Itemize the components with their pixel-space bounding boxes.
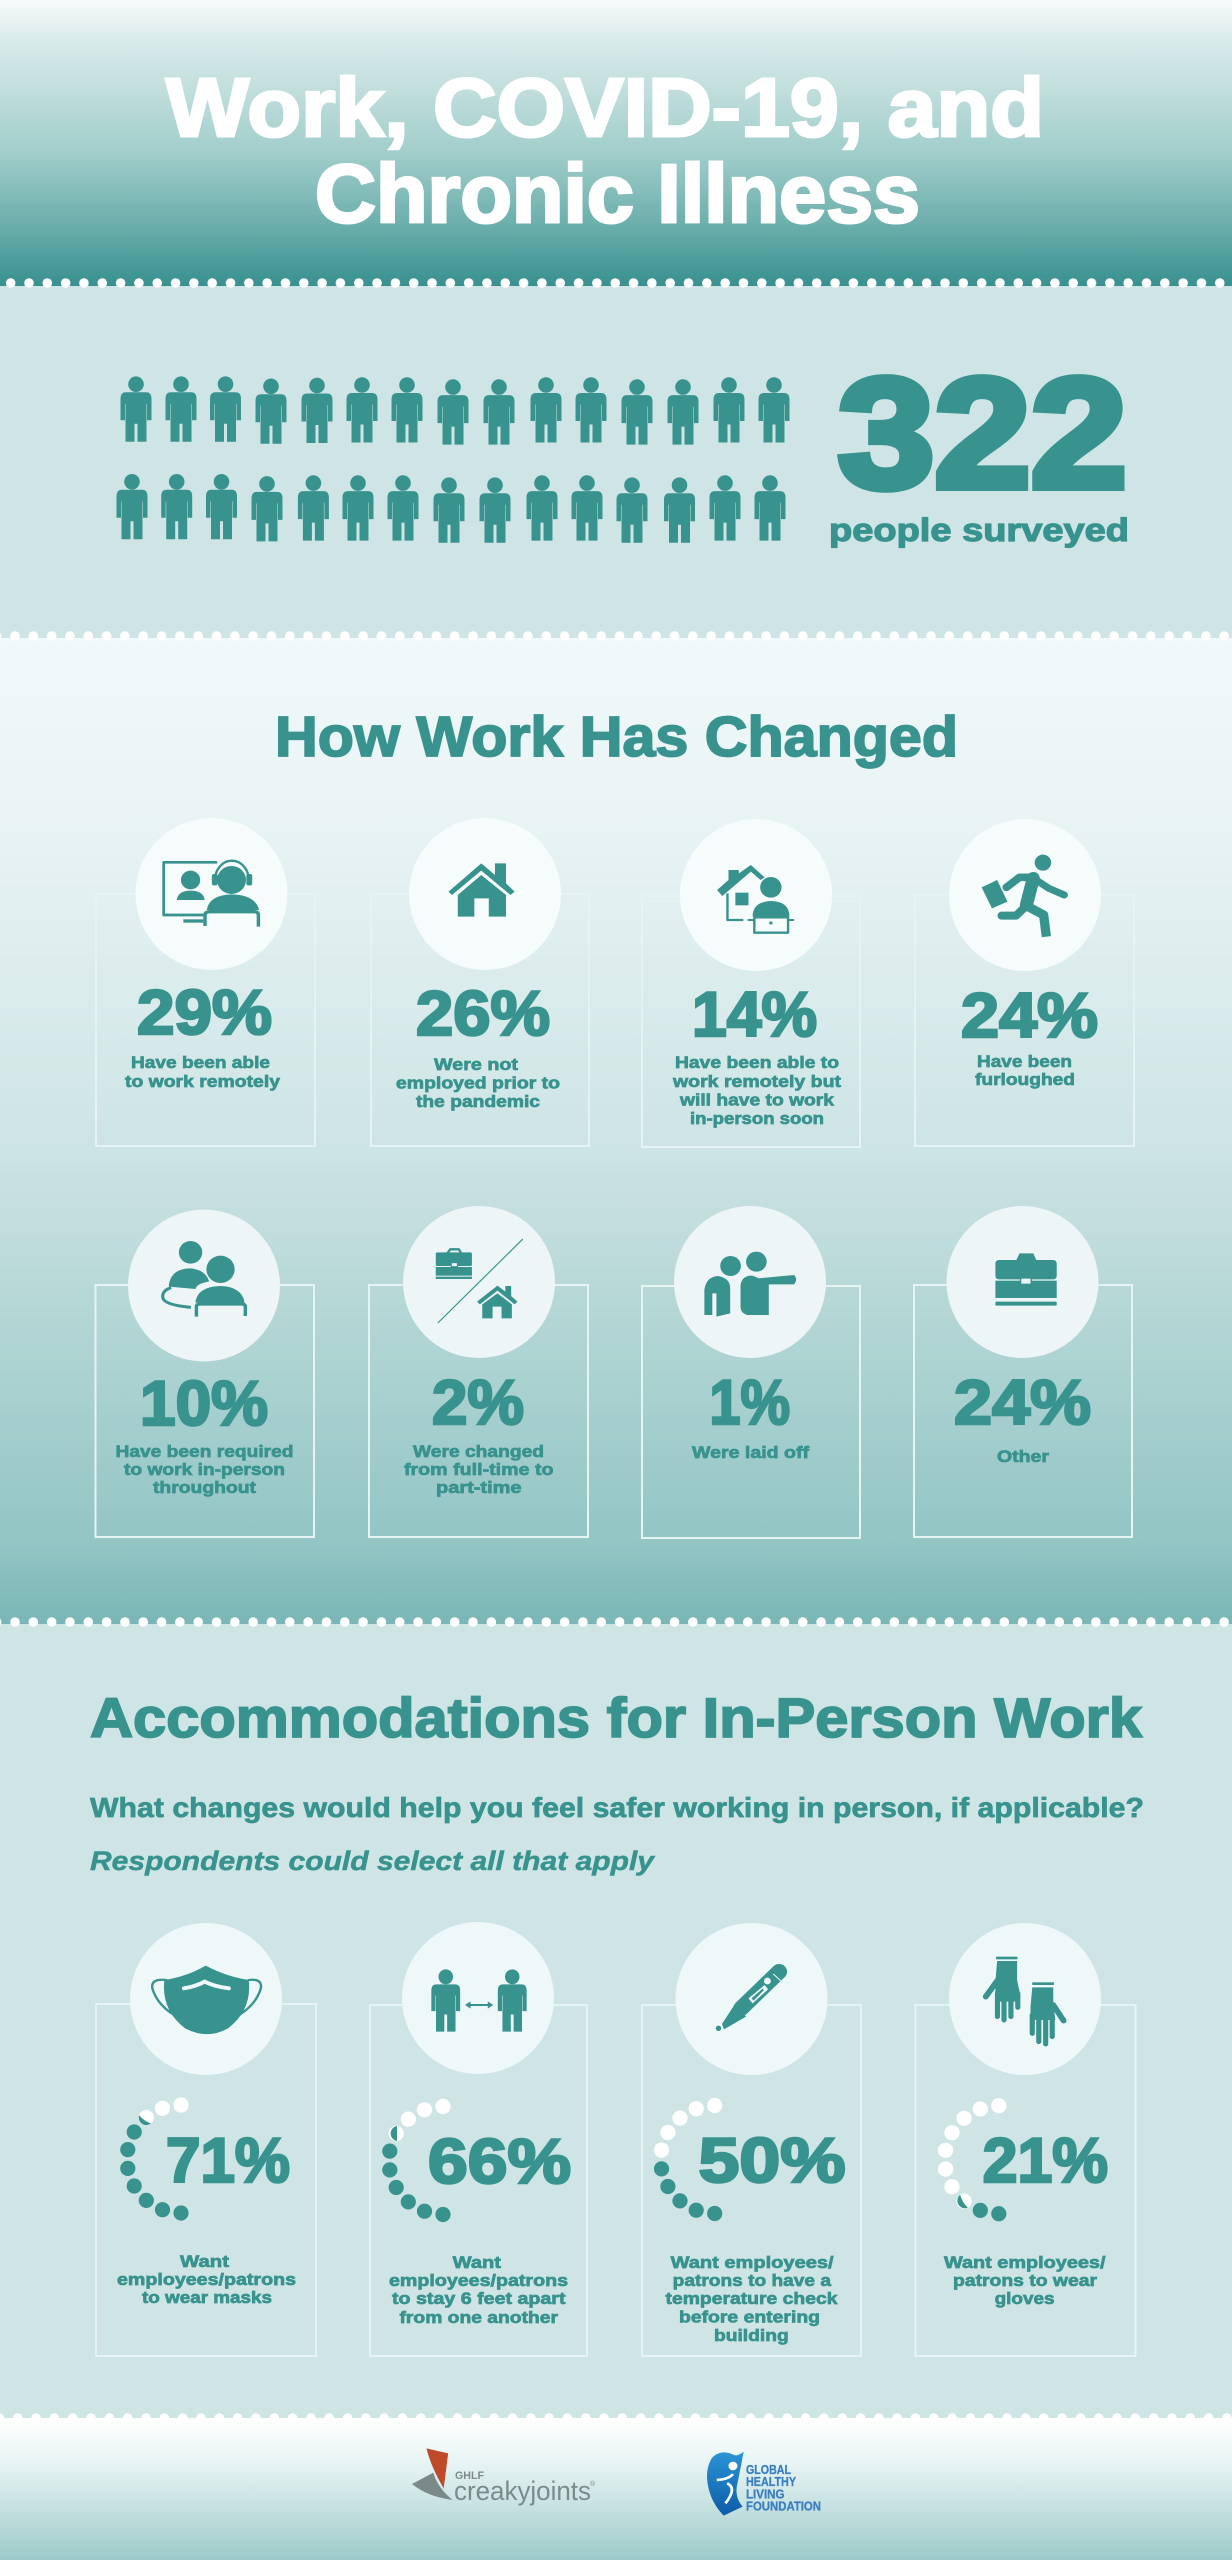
description: Want employees/: [944, 2254, 1106, 2272]
card: six feet apart 66%: [370, 1922, 587, 2356]
description: Were not: [434, 1056, 519, 1074]
description: [125, 1054, 281, 1091]
description: in-person soon: [690, 1110, 824, 1128]
value: 71%: [166, 2126, 290, 2196]
description: employees/patrons: [389, 2272, 568, 2290]
description: [117, 2253, 296, 2307]
panel: accommodations: [0, 1624, 1232, 2418]
description: to stay 6 feet apart: [392, 2290, 566, 2308]
description: patrons to have a: [673, 2272, 832, 2290]
description: Other: [997, 1448, 1050, 1466]
icon: person pointing at another person: [704, 1252, 796, 1317]
value: 10%: [140, 1369, 268, 1439]
icon: briefcase slash house: [436, 1239, 523, 1323]
description: [666, 2254, 838, 2345]
description: temperature check: [666, 2290, 838, 2308]
description: [116, 1443, 294, 1497]
description: part-time: [436, 1479, 522, 1497]
card: gloves 21%: [916, 1923, 1136, 2356]
heading: accommodations: Accommodations for In-Person Work: [90, 1686, 1143, 1749]
note: select all: Respondents could select all that apply: [90, 1846, 656, 1876]
caption: people surveyed: people surveyed: [829, 512, 1129, 548]
title: Chronic Illness: [315, 147, 920, 240]
panel: how work has changed: [0, 638, 1232, 1624]
description: Want: [180, 2253, 230, 2271]
icon: video call with headset: [164, 861, 259, 927]
icon: running man with briefcase: [982, 855, 1064, 937]
description: building: [714, 2327, 789, 2345]
progress dots: [120, 2097, 189, 2221]
description: Were changed: [413, 1443, 544, 1461]
description: patrons to wear: [953, 2272, 1098, 2290]
logo: Global Healthy Living Foundation: HEALTHY: [746, 2475, 797, 2489]
description: [944, 2254, 1106, 2308]
logo: Global Healthy Living Foundation: FOUNDATION: [746, 2500, 821, 2514]
description: to work remotely: [125, 1073, 281, 1091]
panel: header band: [0, 0, 1232, 287]
description: employees/patrons: [117, 2271, 296, 2289]
value: 50%: [698, 2126, 846, 2196]
card: not employed 26%: [371, 818, 589, 1146]
card: required in-person 10%: [96, 1210, 314, 1537]
value: 26%: [416, 979, 550, 1049]
card: full-time to part-time 2%: [369, 1206, 588, 1537]
icon: gloves: [986, 1957, 1064, 2044]
value: 24%: [961, 981, 1098, 1051]
logo: Global Healthy Living Foundation: LIVING: [746, 2488, 784, 2502]
panel: survey size: [0, 286, 1232, 638]
description: from full-time to: [404, 1461, 554, 1479]
progress dots: [382, 2099, 451, 2222]
card: furloughed 24%: [915, 819, 1134, 1146]
card: other 24%: [914, 1206, 1132, 1537]
description: Want: [453, 2254, 502, 2272]
icon: thermometer: [716, 1972, 785, 2031]
description: Were laid off: [692, 1444, 810, 1462]
description: Have been able to: [675, 1054, 839, 1072]
title: Work, COVID-19, and: [166, 61, 1044, 154]
value: 29%: [137, 978, 272, 1048]
logo: Global Healthy Living Foundation: GLOBAL: [746, 2463, 791, 2477]
value: 24%: [954, 1368, 1091, 1438]
description: Want employees/: [671, 2254, 834, 2272]
logo: GHLF CreakyJoints: [412, 2448, 596, 2506]
description: will have to work: [679, 1092, 835, 1110]
icon: face mask: [152, 1966, 261, 2034]
description: Have been able: [131, 1054, 270, 1072]
value: 14%: [692, 980, 817, 1050]
subheading: question: What changes would help you feel safer working in person, if applicable?: [90, 1792, 1144, 1823]
description: gloves: [995, 2290, 1055, 2308]
description: Have been: [977, 1053, 1072, 1071]
description: work remotely but: [672, 1073, 842, 1091]
description: [404, 1443, 554, 1497]
description: [396, 1056, 560, 1111]
card: work remotely 29%: [96, 818, 315, 1146]
icon: home worker with laptop: [717, 865, 793, 933]
icon: house: [449, 863, 515, 917]
icon: two people at table: [163, 1241, 245, 1317]
description: the pandemic: [416, 1093, 540, 1111]
big number: 322: 322: [838, 347, 1127, 521]
value: 2%: [432, 1368, 524, 1438]
description: before entering: [679, 2308, 820, 2326]
value: 1%: [710, 1368, 790, 1438]
progress dots: [938, 2098, 1006, 2221]
description: [672, 1054, 842, 1128]
description: from one another: [400, 2309, 559, 2327]
card: remote then in-person 14%: [642, 819, 860, 1147]
card: laid off 1%: [642, 1206, 860, 1538]
heading: how work has changed: How Work Has Changed: [275, 705, 958, 769]
description: throughout: [153, 1479, 257, 1497]
logo: GHLF CreakyJoints: GHLF: [455, 2470, 484, 2482]
icon: briefcase: [995, 1253, 1057, 1306]
logo: GHLF CreakyJoints: ®: [590, 2480, 596, 2488]
description: to work in-person: [124, 1461, 285, 1479]
card: temperature check 50%: [642, 1923, 861, 2356]
description: furloughed: [975, 1071, 1075, 1089]
panel: footer: [0, 2418, 1232, 2560]
card: masks 71%: [96, 1923, 316, 2356]
progress dots: [654, 2098, 722, 2221]
description: [975, 1053, 1075, 1089]
logo: Global Healthy Living Foundation: [707, 2452, 821, 2516]
description: to wear masks: [142, 2289, 272, 2307]
icon: two people apart: [431, 1969, 527, 2032]
title: [166, 61, 1044, 240]
people icons: two rows of figures: [116, 376, 790, 543]
value: 21%: [983, 2126, 1108, 2196]
description: Have been required: [116, 1443, 294, 1461]
logo: GHLF CreakyJoints: creakyjoints: [454, 2476, 591, 2506]
description: [389, 2254, 568, 2327]
value: 66%: [428, 2127, 571, 2197]
description: employed prior to: [396, 1074, 560, 1092]
